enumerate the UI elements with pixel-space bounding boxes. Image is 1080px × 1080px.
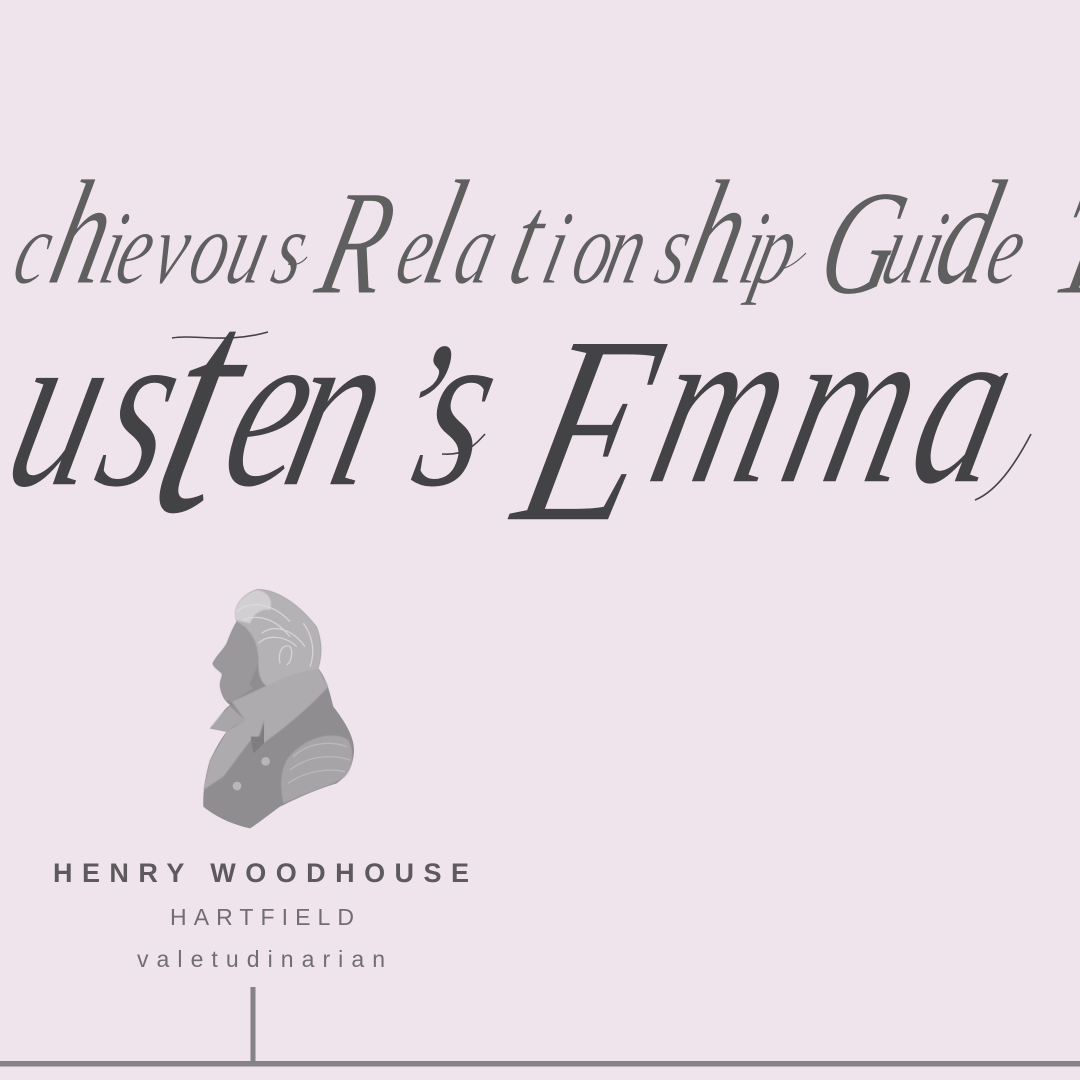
subtitle: mischievous relationship guide: s (262, 191, 320, 307)
name: Henry Woodhouse: HENRY WOODHOUSE (53, 858, 469, 888)
family tree connector (0, 987, 1080, 1066)
subtitle: mischievous relationship guide: u (216, 191, 282, 307)
title: Austen's Emma: e (203, 277, 343, 537)
subtitle: mischievous relationship guide: d (922, 149, 1017, 316)
flourishes: subtitle hairline swashes (288, 253, 806, 269)
portrait: Henry Woodhouse silhouette (203, 589, 354, 828)
subtitle: mischievous relationship guide: h (37, 149, 131, 316)
subtitle: mischievous relationship guide: a (444, 191, 510, 307)
subtitle: mischievous relationship guide: e (106, 191, 168, 307)
subtitle: mischievous relationship guide: i (532, 191, 582, 307)
front curl highlight (235, 590, 271, 623)
buttons (261, 757, 270, 766)
location: Hartfield: HARTFIELD (170, 904, 354, 930)
descriptor: valetudinarian: valetudinarian (137, 946, 385, 972)
subtitle: mischievous relationship guide: o (179, 191, 244, 307)
flourishes: title hairline swashes (172, 332, 1031, 500)
title: Austen's Emma: n (264, 277, 414, 537)
hair (235, 589, 321, 686)
title: Austen's Emma: t (126, 226, 286, 581)
title: Austen's Emma: s (394, 277, 525, 537)
coat sleeve (281, 735, 352, 803)
collar and lapels (203, 668, 328, 790)
subtitle: mischievous relationship guide: i (909, 191, 958, 307)
hair strands (237, 605, 313, 667)
subtitle: mischievous relationship guide: s (646, 191, 703, 307)
subtitle: mischievous relationship guide: n (594, 191, 660, 307)
subtitle: mischievous relationship guide (0, 149, 1080, 326)
title: Austen's Emma (0, 226, 1040, 581)
title: Austen's Emma: E (492, 279, 688, 578)
subtitle: mischievous relationship guide: c (4, 191, 65, 307)
inner tonal shading (203, 589, 352, 803)
subtitle: mischievous relationship guide: G (805, 159, 922, 326)
title: Austen's Emma: m (761, 274, 948, 534)
cravat (210, 706, 245, 732)
subtitle: mischievous relationship guide: u (872, 191, 937, 307)
subtitle: mischievous relationship guide: e (386, 191, 448, 307)
subtitle: mischievous relationship guide: t (498, 167, 561, 311)
subtitle: mischievous relationship guide: l (410, 149, 480, 316)
lapel notch (251, 723, 264, 753)
subtitle: mischievous relationship guide: v (142, 191, 204, 307)
subtitle: mischievous relationship guide: R (304, 159, 410, 326)
subtitle: mischievous relationship guide: o (562, 191, 627, 307)
face (213, 622, 258, 702)
subtitle: mischievous relationship guide: e (976, 191, 1038, 307)
subtitle: mischievous relationship guide: h (671, 149, 766, 316)
title: Austen's Emma: a (891, 274, 1040, 534)
subtitle: mischievous relationship guide: i (89, 191, 139, 307)
title: Austen's Emma: s (77, 277, 208, 537)
subtitle: mischievous relationship guide: p (739, 191, 809, 307)
subtitle: mischievous relationship guide: i (729, 191, 778, 307)
title: Austen's Emma: m (630, 274, 817, 534)
sleeve strands (288, 743, 350, 783)
title: Austen's Emma: ’ (363, 299, 471, 531)
body silhouette (203, 589, 354, 828)
